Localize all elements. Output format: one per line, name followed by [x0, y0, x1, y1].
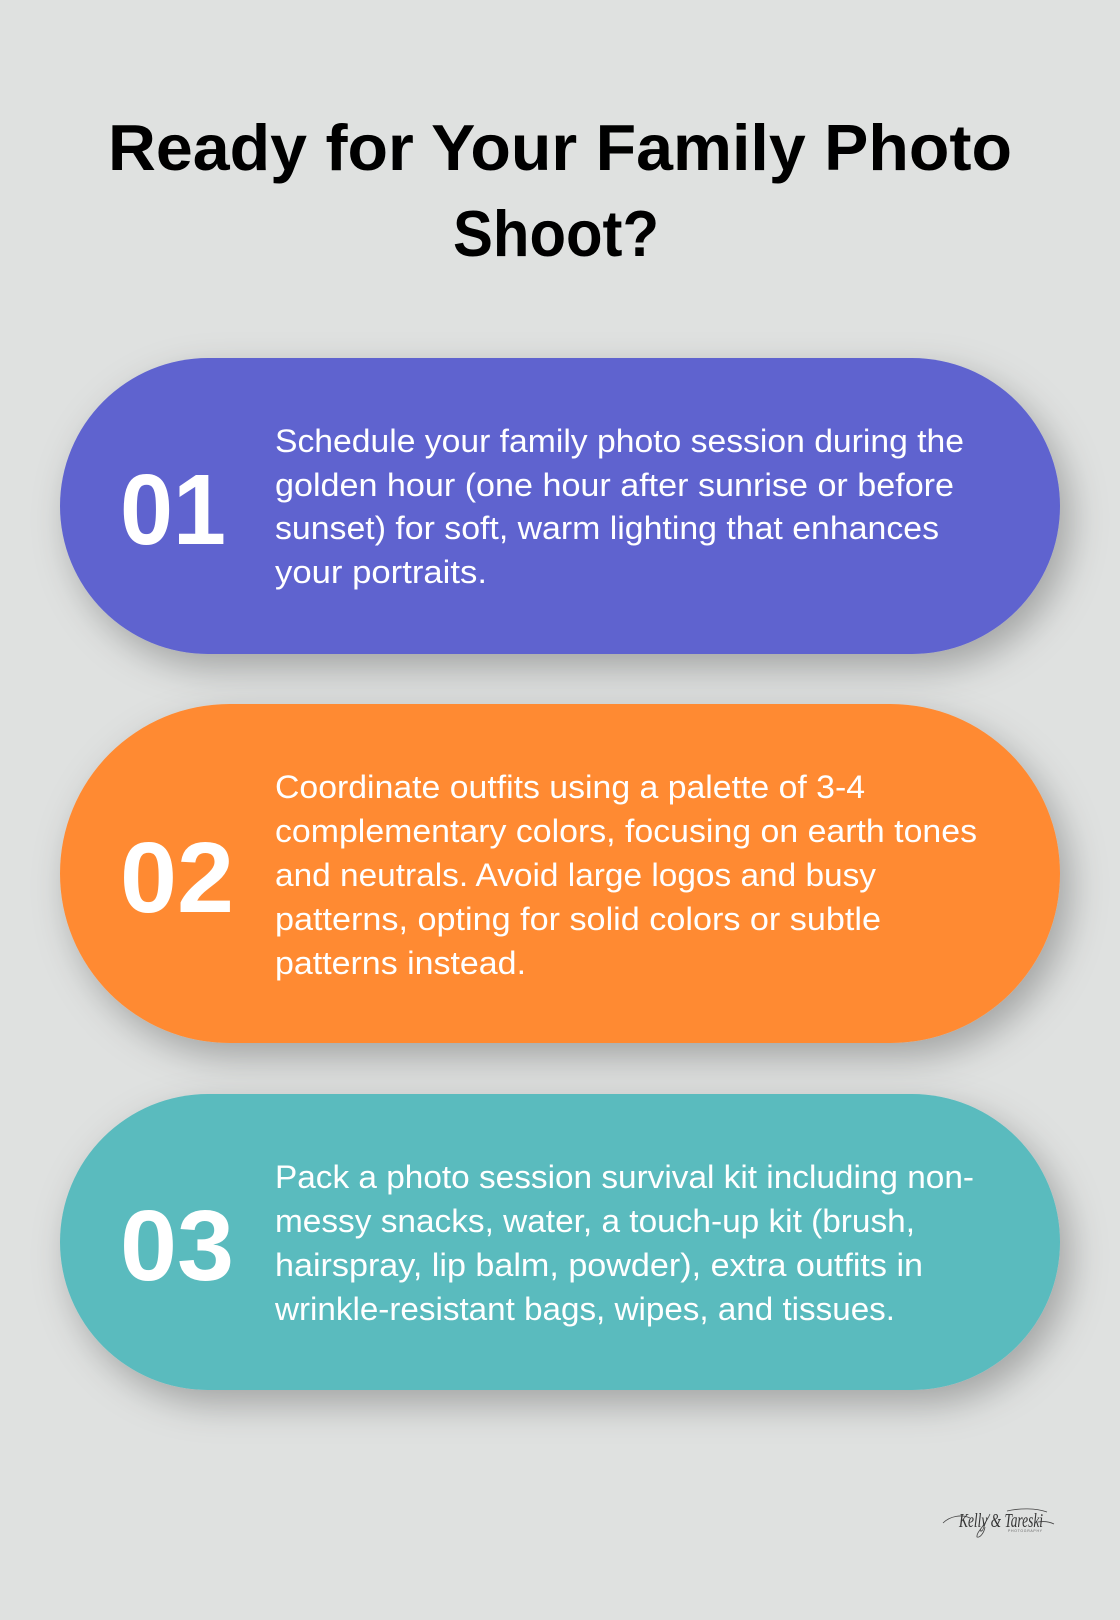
text block 03: wrinkle-resistant bags, wipes, and tissues.	[274, 1291, 895, 1327]
text block 03: hairspray, lip balm, powder), extra outfits in	[275, 1247, 923, 1283]
title	[108, 111, 1012, 270]
panel: step 03	[60, 1094, 1060, 1390]
text block 01: Schedule your family photo session during the	[275, 423, 964, 459]
pill background 01	[60, 358, 1060, 654]
text block 03: Pack a photo session survival kit including non-	[275, 1159, 974, 1195]
panel: step 02	[60, 704, 1060, 1043]
text block 02: and neutrals. Avoid large logos and busy	[275, 857, 876, 893]
number 03: 03	[120, 1190, 234, 1302]
title: Shoot?	[453, 197, 659, 270]
text block 01: sunset) for soft, warm lighting that enhances	[275, 510, 939, 546]
text block 03	[274, 1159, 974, 1327]
number 02: 02	[120, 822, 234, 934]
pill background 02	[60, 704, 1060, 1043]
text block 01: golden hour (one hour after sunrise or before	[275, 467, 954, 503]
text block 03: messy snacks, water, a touch-up kit (brush,	[275, 1203, 915, 1239]
text block 02: complementary colors, focusing on earth tones	[275, 813, 977, 849]
logo: signature: Kelly & Tareski	[958, 1510, 1043, 1532]
pill background 03	[60, 1094, 1060, 1390]
number 01: 01	[120, 454, 226, 566]
title: Ready for Your Family Photo	[108, 111, 1012, 184]
logo: signature: PHOTOGRAPHY	[1008, 1529, 1043, 1533]
text block 02: Coordinate outfits using a palette of 3-4	[275, 769, 865, 805]
text block 01: your portraits.	[275, 554, 487, 590]
text block 01	[275, 423, 964, 590]
text block 02: patterns instead.	[275, 945, 526, 981]
logo: signature	[943, 1509, 1054, 1537]
panel: step 01	[60, 358, 1060, 654]
text block 02: patterns, opting for solid colors or subtle	[275, 901, 881, 937]
text block 02	[275, 769, 977, 981]
